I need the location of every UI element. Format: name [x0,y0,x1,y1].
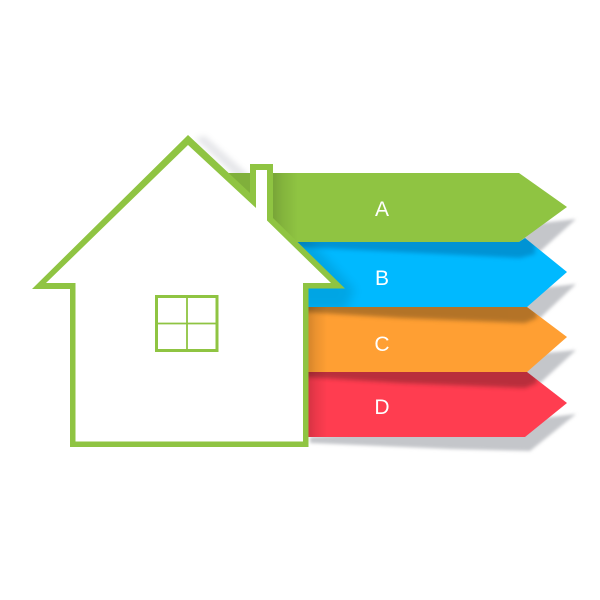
shade on ribbon D [308,372,539,390]
house outline [32,135,345,447]
shade on ribbon B [298,238,537,260]
house soft shadow [195,136,250,190]
ribbon B [298,238,567,307]
ribbon C [308,307,567,372]
ribbon drop shadows [310,219,576,451]
label D: D [374,396,390,419]
shade on ribbon C [308,307,539,326]
house side shadow on ribbons [225,170,355,440]
house [32,135,345,447]
ribbon A [200,173,567,242]
label C: C [374,333,390,356]
house interior [46,145,331,442]
ribbon D [308,372,567,437]
label B: B [375,267,389,290]
window [156,296,217,350]
label A: A [375,198,389,221]
